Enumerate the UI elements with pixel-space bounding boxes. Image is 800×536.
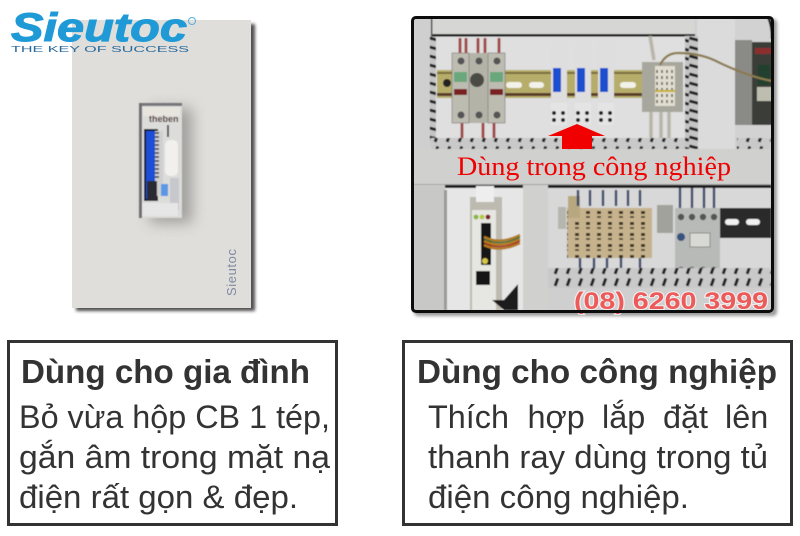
body text: lắp [602, 398, 645, 435]
caption: Dùng trong công nghiệp: Dùng trong công nghiệp [457, 151, 731, 181]
body text: điện công nghiệp. [428, 479, 689, 515]
phone number watermark: (08) 6260 3999 [574, 288, 768, 315]
arrow: red up arrow [548, 124, 605, 149]
panel: industrial use [404, 342, 792, 524]
body text [428, 398, 768, 515]
photo contents [414, 17, 772, 310]
body text: Bỏ vừa hộp CB 1 tép, [19, 399, 330, 435]
heading: Dùng cho gia đình [21, 353, 310, 390]
phone number watermark: (08) 6260 3999 [574, 288, 768, 315]
black frame [412, 18, 772, 312]
icon: timer in plate window: theben [149, 114, 179, 124]
body text [19, 399, 331, 515]
panel: wall plate product [72, 20, 255, 311]
body text: hợp [528, 399, 585, 435]
icon: timer in plate window [139, 103, 182, 218]
body text: thanh ray dùng trong tủ [428, 439, 768, 475]
label: Sieutoc on plate: Sieutoc [224, 248, 239, 296]
logo: Sieutoc: Sieutoc [11, 6, 187, 50]
body text: đặt [663, 399, 708, 435]
body text: điện rất gọn & đẹp. [19, 479, 298, 515]
body text: lên [725, 399, 768, 435]
panel: industrial cabinet photo [411, 16, 777, 316]
body text: gắn âm trong mặt nạ [19, 438, 331, 475]
heading: Dùng cho công nghiệp [417, 353, 777, 390]
panel: household use [8, 342, 336, 524]
logo: Sieutoc: THE KEY OF SUCCESS [11, 45, 189, 54]
body text: Thích [428, 399, 509, 435]
